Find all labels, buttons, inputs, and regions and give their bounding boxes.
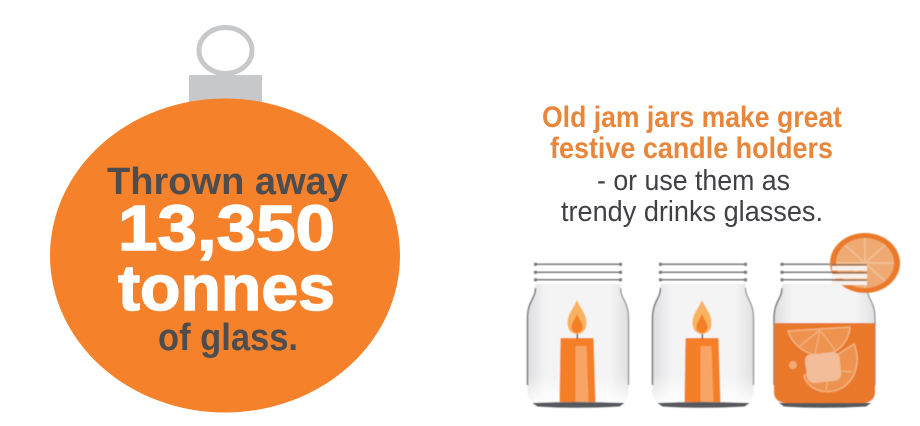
icon: orange slice garnish [830,233,900,293]
bauble ornament [50,28,400,412]
drink contents: orange slices and ice [788,327,857,392]
icon: candle [684,300,720,402]
heading and caption text [542,101,842,228]
caption line 2: trendy drinks glasses. [561,196,823,228]
icon: candle [560,300,596,402]
text: tonnes: tonnes [118,252,335,324]
heading line 1: Old jam jars make great [542,101,842,134]
icon: bauble hanging ring [199,28,252,74]
jar body [774,263,875,408]
icon: bauble cap [189,75,262,102]
candle jar 1 [528,263,628,408]
drinks jar with orange [774,233,900,408]
jar thread highlights over slice [832,266,867,285]
bauble body [50,98,400,412]
number: 13,350: 13,350 [118,192,335,264]
candle jar 2 [652,263,754,408]
drink liquid [774,323,875,403]
text: thrown away: Thrown away [107,161,348,203]
heading line 2: festive candle holders [550,132,833,165]
text: of glass: of glass. [158,317,298,359]
caption line 1: - or use them as [597,165,790,197]
